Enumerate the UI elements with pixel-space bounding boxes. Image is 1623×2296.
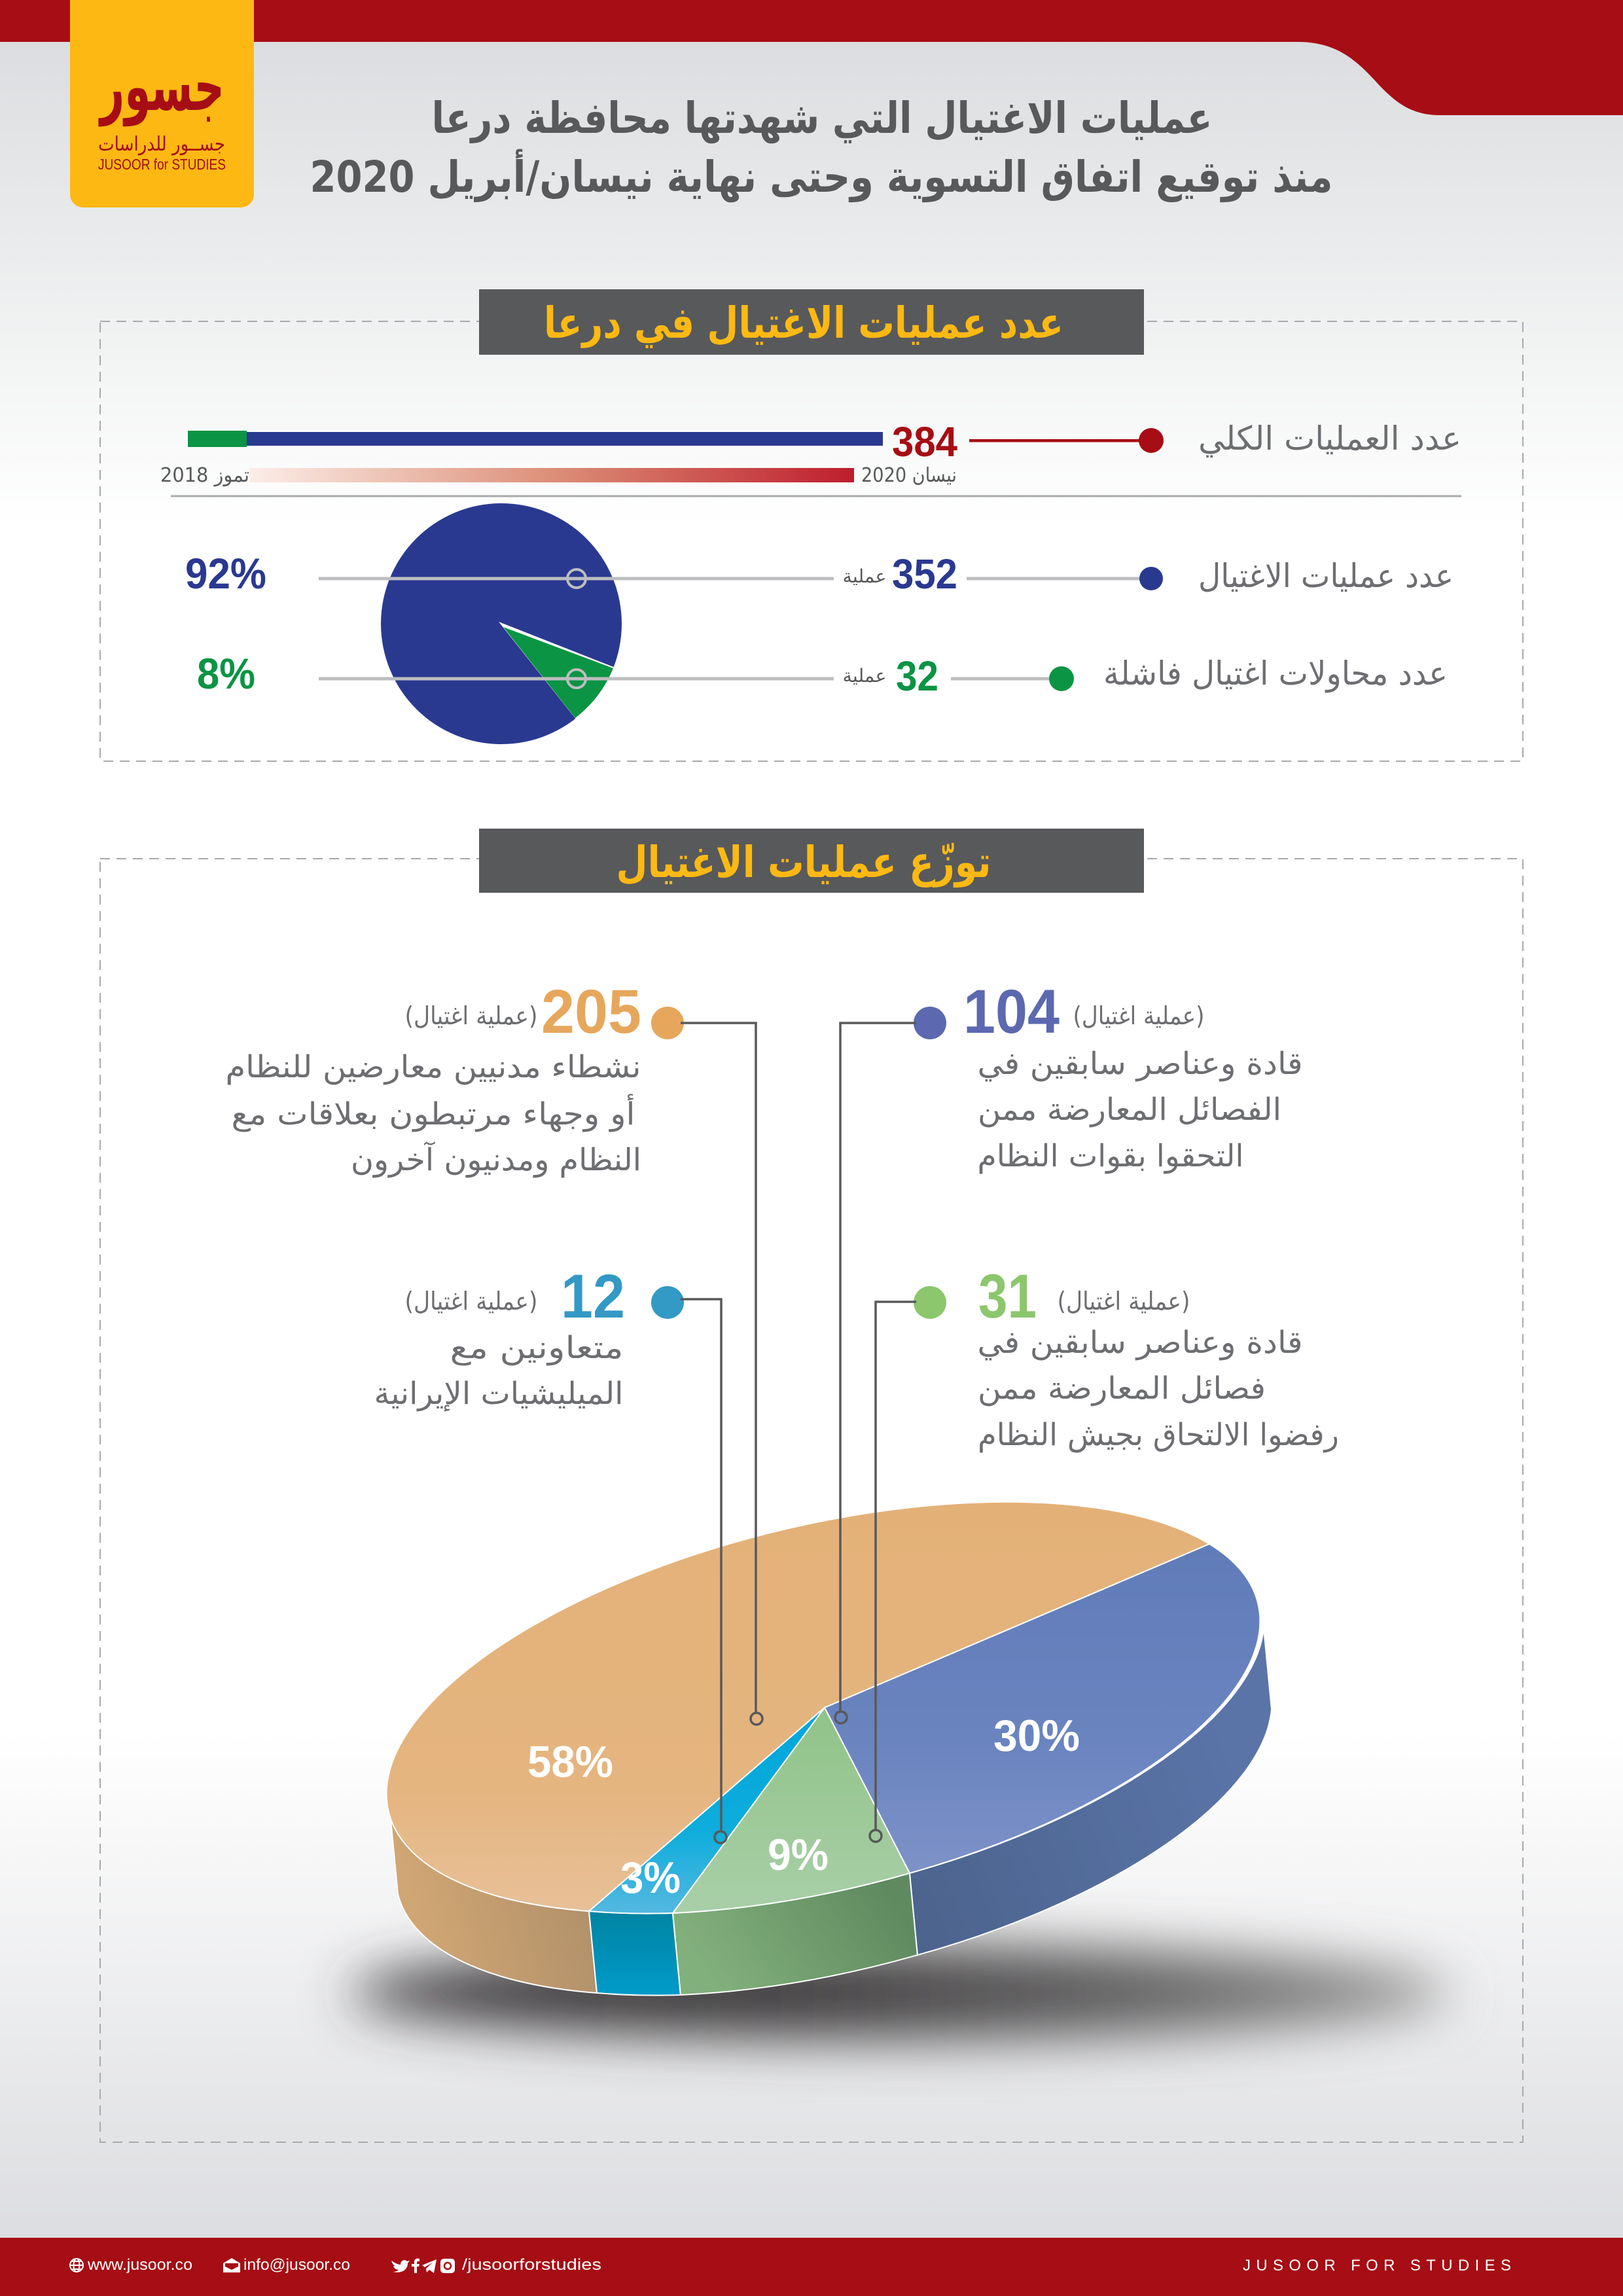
- wall green: [673, 1873, 918, 1995]
- description: الميليشيات الإيرانية: [374, 1376, 623, 1412]
- callout: former commanders joined regime: [835, 977, 1302, 1723]
- logo arabic name: جســور للدراسات: [98, 133, 225, 156]
- row: failed: [197, 649, 1448, 700]
- social handle: /jusoorforstudies: [462, 2256, 601, 2274]
- callout: civil activists: [225, 977, 762, 1725]
- description: نشطاء مدنيين معارضين للنظام: [225, 1049, 641, 1085]
- icon: envelope: [223, 2258, 240, 2272]
- unit: عملية: [843, 665, 886, 687]
- logo english name: JUSOOR for STUDIES: [98, 156, 226, 173]
- description: النظام ومدنيون آخرون: [351, 1141, 641, 1178]
- slice blue: [825, 1544, 1260, 1873]
- label: عدد عمليات الاغتيال: [1198, 557, 1454, 595]
- unit: (عملية اغتيال): [1073, 1001, 1204, 1030]
- logo calligraphy: جسور: [98, 46, 224, 126]
- timeline end label: نيسان 2020: [861, 464, 957, 487]
- wall cyan: [589, 1911, 681, 1996]
- icon: twitter: [391, 2260, 410, 2272]
- percent 8: 8%: [197, 649, 255, 698]
- panel: number of assassinations: [100, 289, 1523, 761]
- description: قادة وعناصر سابقين في: [978, 1325, 1302, 1361]
- percent 9: 9%: [768, 1830, 829, 1880]
- panel heading: [479, 289, 1144, 355]
- percent 3: 3%: [620, 1853, 681, 1903]
- title line 2: منذ توقيع اتفاق التسوية وحتى نهاية نيسان/أبريل 2020: [310, 149, 1333, 203]
- label: عدد محاولات اغتيال فاشلة: [1103, 655, 1448, 693]
- slice orange: [387, 1502, 1209, 1911]
- value 205: 205: [541, 977, 641, 1047]
- timeline start label: تموز 2018: [160, 464, 249, 487]
- description: [225, 1049, 641, 1178]
- heading text: توزّع عمليات الاغتيال: [616, 837, 991, 888]
- unit: (عملية اغتيال): [404, 1001, 538, 1030]
- timeline bar: [249, 468, 854, 482]
- brand name: JUSOOR FOR STUDIES: [1243, 2257, 1511, 2274]
- description: قادة وعناصر سابقين في: [978, 1046, 1302, 1082]
- 3d pie chart: [387, 1502, 1272, 1996]
- description: متعاونين مع: [450, 1330, 623, 1366]
- percent 92: 92%: [185, 549, 266, 598]
- total label: عدد العمليات الكلي: [1198, 420, 1461, 457]
- callout: collaborators: [374, 1262, 726, 1843]
- description: فصائل المعارضة ممن: [978, 1371, 1266, 1407]
- slice cyan: [589, 1708, 825, 1914]
- unit: (عملية اغتيال): [404, 1287, 538, 1316]
- row: successful: [185, 549, 1454, 598]
- website: www.jusoor.co: [87, 2256, 192, 2274]
- percent 58: 58%: [527, 1737, 613, 1787]
- icon: telegram: [422, 2259, 437, 2273]
- description: رفضوا الالتحاق بجيش النظام: [978, 1417, 1339, 1453]
- title line 1: عمليات الاغتيال التي شهدتها محافظة درعا: [432, 93, 1212, 144]
- wall blue: [910, 1628, 1272, 1955]
- description: التحقوا بقوات النظام: [978, 1138, 1243, 1174]
- panel heading: [479, 829, 1144, 893]
- pie chart: [381, 503, 622, 744]
- description: أو وجهاء مرتبطون بعلاقات مع: [232, 1094, 635, 1132]
- icon: instagram: [440, 2259, 455, 2273]
- title: [310, 93, 1333, 203]
- value 104: 104: [963, 977, 1060, 1047]
- email: info@jusoor.co: [243, 2256, 350, 2274]
- value 12: 12: [561, 1262, 625, 1331]
- value 31: 31: [978, 1262, 1037, 1331]
- description: الفصائل المعارضة ممن: [978, 1092, 1281, 1128]
- description: [374, 1330, 623, 1412]
- icon: facebook: [412, 2259, 419, 2273]
- callout: former commanders refused: [870, 1262, 1339, 1842]
- header band: [0, 0, 1623, 115]
- footer: [0, 2238, 1623, 2296]
- description: [978, 1325, 1339, 1453]
- percent 30: 30%: [993, 1711, 1080, 1761]
- total connector: [969, 428, 1164, 453]
- description: [978, 1046, 1302, 1174]
- panel: distribution: [100, 829, 1523, 2142]
- wall orange: [390, 1812, 597, 1993]
- value 352: 352: [892, 550, 957, 598]
- logo tab: [70, 0, 254, 207]
- icon: globe: [70, 2259, 83, 2272]
- total bar: [186, 430, 885, 448]
- value 32: 32: [896, 653, 938, 700]
- total value: 384: [892, 418, 957, 465]
- unit: (عملية اغتيال): [1058, 1287, 1190, 1316]
- heading text: عدد عمليات الاغتيال في درعا: [544, 298, 1063, 348]
- unit: عملية: [843, 565, 886, 587]
- shadow under pie: [350, 1946, 1450, 2040]
- slice green: [673, 1708, 910, 1913]
